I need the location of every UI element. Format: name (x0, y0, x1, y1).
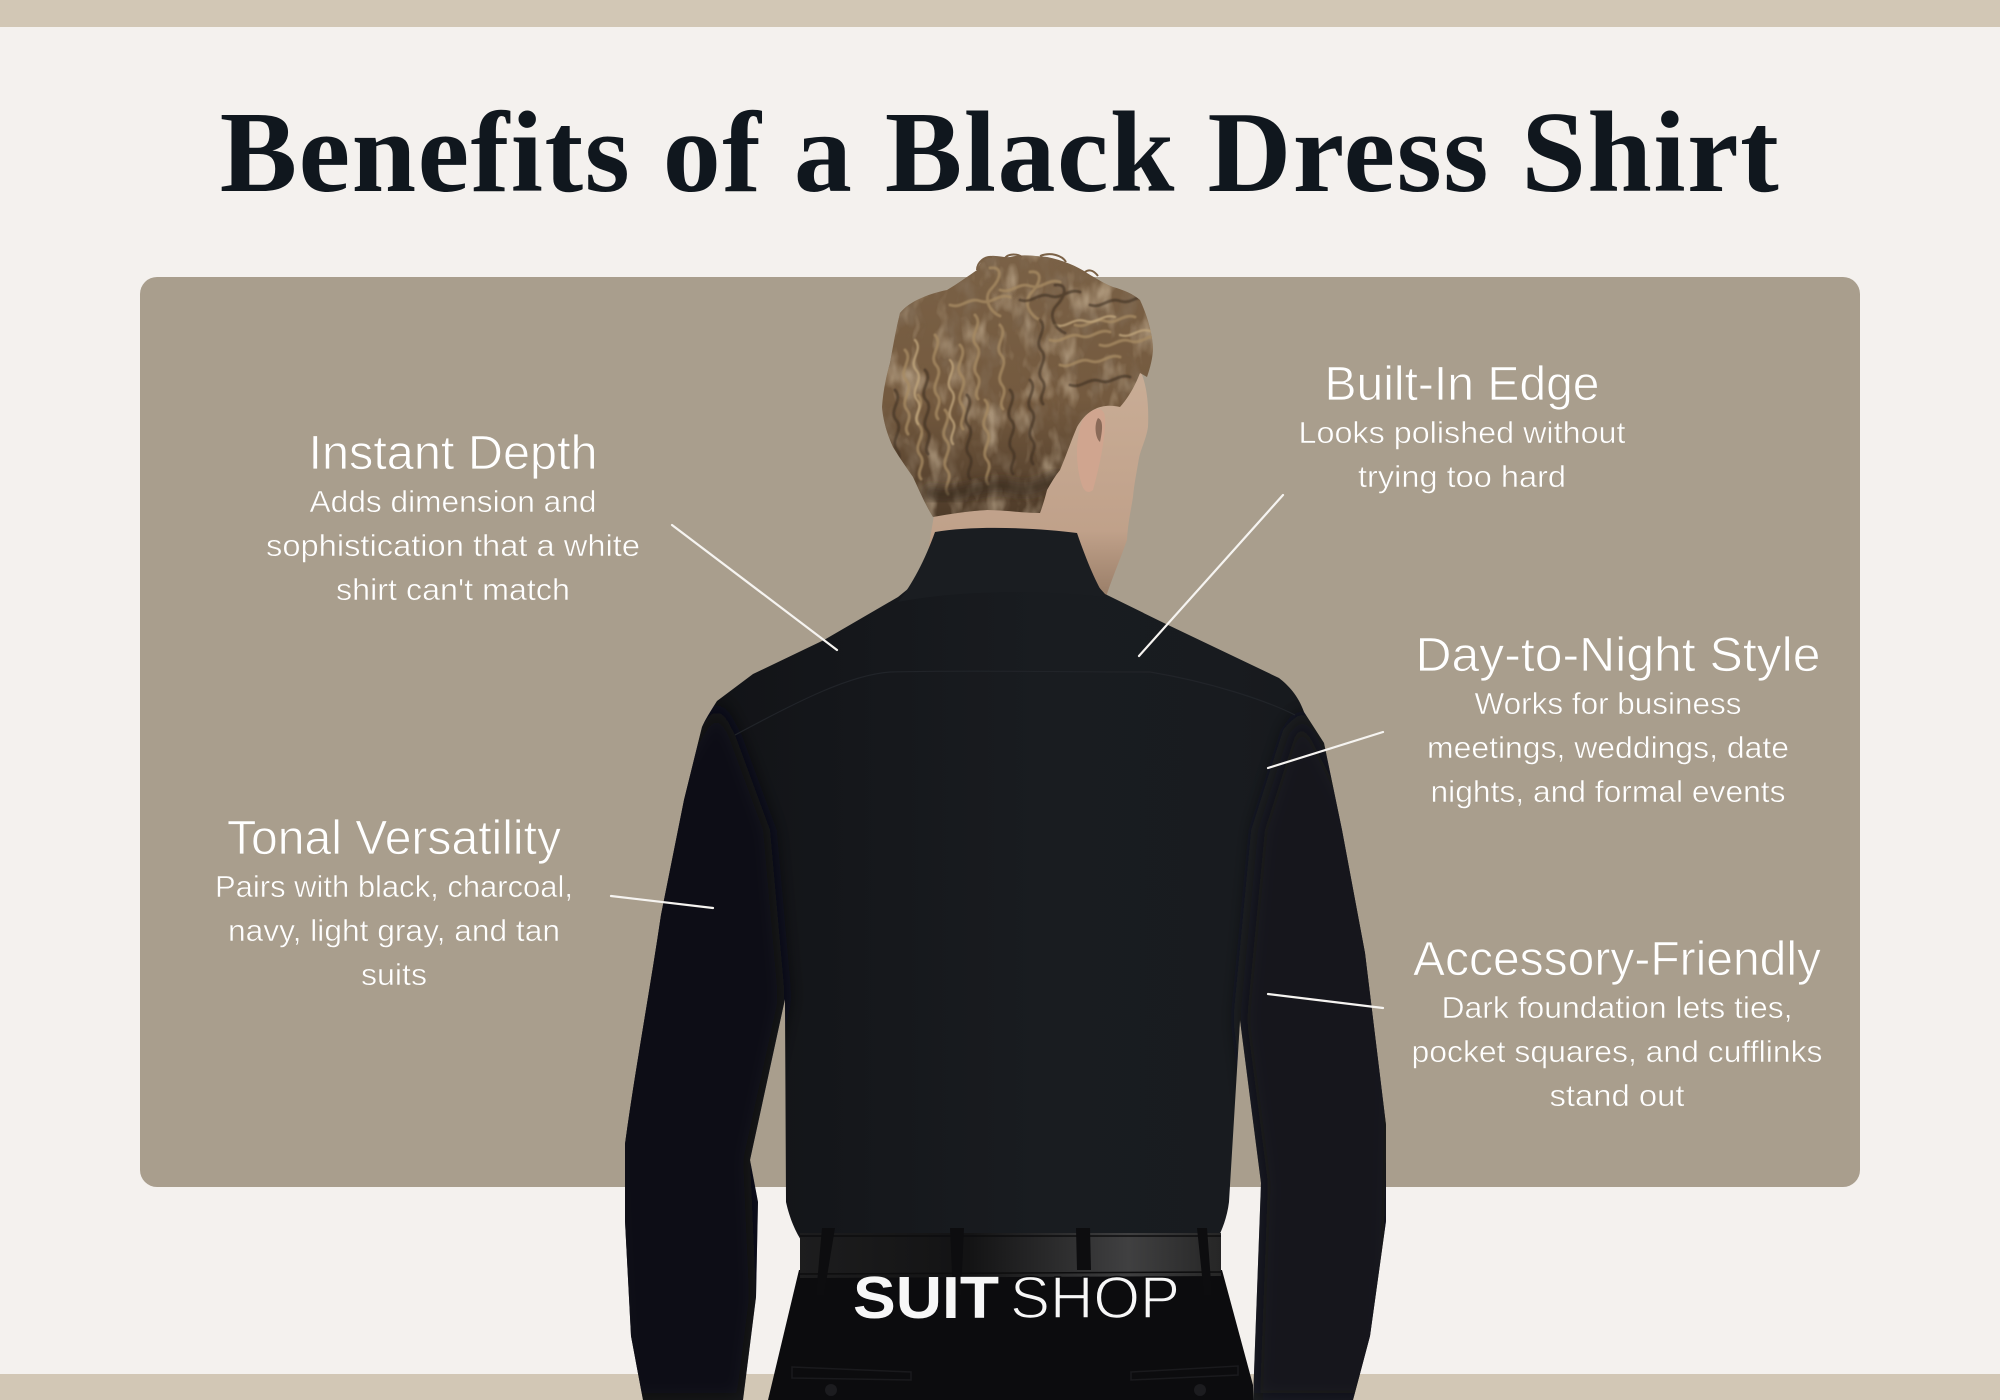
callout: Tonal Versatility: navy, light gray, and tan (228, 913, 560, 948)
callout: Day-to-Night Style (1416, 629, 1820, 809)
callout: Day-to-Night Style: meetings, weddings, date (1427, 730, 1789, 765)
leader lines (611, 495, 1383, 1008)
line: Day-to-Night Style (1268, 732, 1383, 768)
callout: Instant Depth: shirt can't match (336, 572, 570, 607)
line: Built-In Edge (1139, 495, 1283, 656)
belt loops (816, 1228, 1212, 1295)
callout: Accessory-Friendly: stand out (1550, 1078, 1685, 1113)
callout: Tonal Versatility: Tonal Versatility (227, 812, 561, 865)
callout: Accessory-Friendly: pocket squares, and cufflinks (1412, 1034, 1822, 1069)
callout: Instant Depth: sophistication that a white (266, 528, 640, 563)
logo: SUITSHOP: SUIT (853, 1265, 999, 1331)
line: Instant Depth (672, 525, 837, 650)
callout: Instant Depth (266, 427, 640, 607)
logo: SUITSHOP (853, 1265, 1180, 1331)
callout: Accessory-Friendly (1412, 933, 1822, 1113)
callout: Tonal Versatility (215, 812, 573, 992)
callout: Instant Depth: Adds dimension and (310, 484, 596, 519)
top band (0, 0, 2000, 27)
callout: Tonal Versatility: suits (361, 957, 427, 992)
line: Accessory-Friendly (1268, 994, 1383, 1008)
callout: Built-In Edge (1298, 358, 1626, 494)
title: Benefits of a Black Dress Shirt (220, 89, 1780, 217)
neck and face edge (920, 370, 1148, 600)
sleeve shading (600, 701, 1400, 1400)
callout: Day-to-Night Style: nights, and formal events (1430, 774, 1786, 809)
callout: Tonal Versatility: Pairs with black, charcoal, (215, 869, 573, 904)
pants (768, 1270, 1253, 1400)
pants pockets and buttons (792, 1366, 1238, 1396)
frizz at top of hair (977, 254, 1098, 276)
line: Tonal Versatility (611, 896, 713, 908)
callout: Accessory-Friendly: Accessory-Friendly (1413, 933, 1821, 986)
callout: Day-to-Night Style: Works for business (1474, 686, 1742, 721)
bottom band (0, 1374, 2000, 1400)
hair (882, 253, 1153, 517)
callout: Instant Depth: Instant Depth (308, 427, 598, 480)
collar (898, 528, 1105, 602)
callout: Accessory-Friendly: Dark foundation lets ties, (1442, 990, 1792, 1025)
callout: Built-In Edge: Built-In Edge (1324, 358, 1600, 411)
callout: Built-In Edge: trying too hard (1358, 459, 1566, 494)
logo: SUITSHOP: SHOP (1010, 1265, 1180, 1331)
shirt body and sleeves (625, 575, 1386, 1400)
callout: Built-In Edge: Looks polished without (1298, 415, 1626, 450)
yoke seam (735, 671, 1295, 735)
ear (1077, 409, 1105, 492)
belt (800, 1228, 1221, 1295)
panel: taupe background (140, 277, 1860, 1187)
figure: man from behind in black dress shirt (600, 250, 1400, 1400)
callout: Day-to-Night Style: Day-to-Night Style (1416, 629, 1820, 682)
